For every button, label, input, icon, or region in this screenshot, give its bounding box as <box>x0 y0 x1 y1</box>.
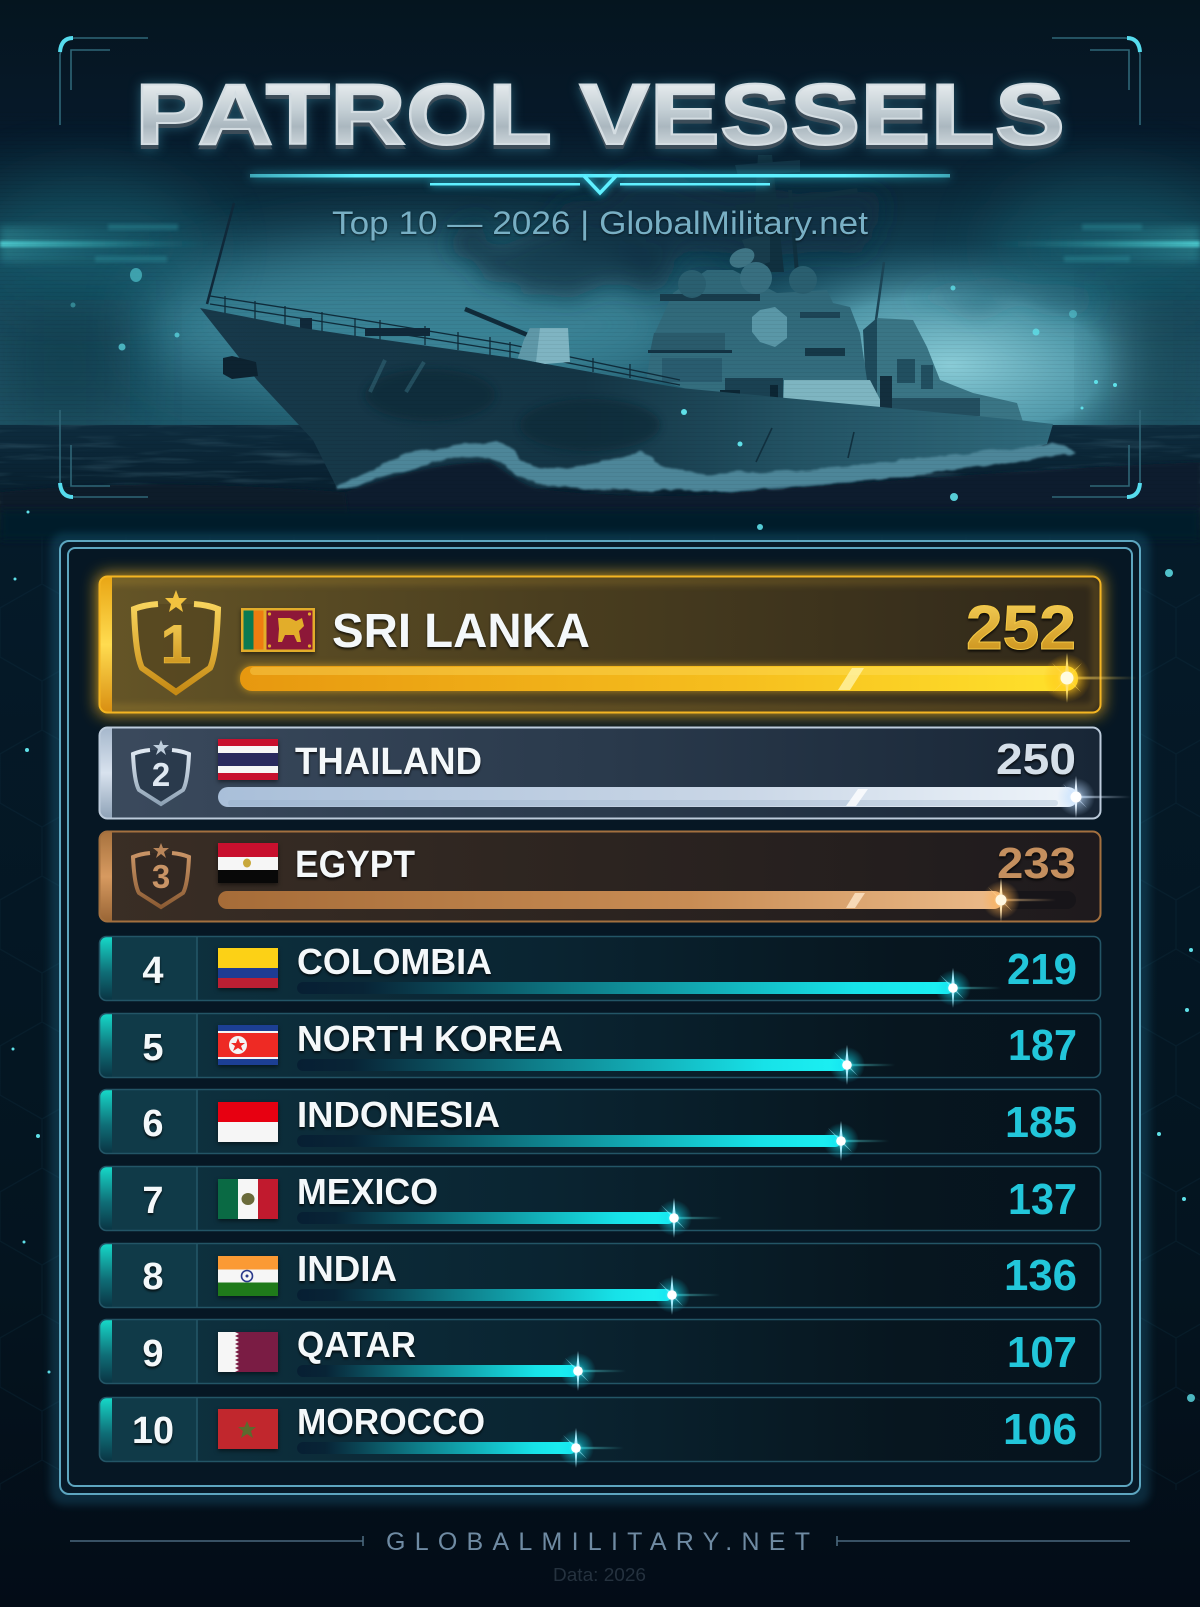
main mast <box>726 155 858 285</box>
flag: North Korea <box>218 1025 278 1065</box>
name: MOROCCO <box>297 1401 485 1442</box>
rank: 4 <box>142 950 164 992</box>
value: 219 <box>1007 945 1077 994</box>
title: PATROL VESSELS <box>135 67 1065 163</box>
hex grid background pattern <box>0 530 1200 1490</box>
HUD corner bracket: top left <box>60 38 148 125</box>
rank shield 1: 1 <box>161 613 191 675</box>
row 4: Colombia <box>99 936 1101 1008</box>
rank shield 2: 2 <box>152 756 170 793</box>
bar <box>218 878 1076 922</box>
value: 187 <box>1008 1021 1077 1070</box>
row 3: Egypt <box>99 831 1101 922</box>
row 2: Thailand <box>99 727 1131 819</box>
row 7: Mexico <box>99 1166 1101 1238</box>
rank shield 1 <box>134 590 218 692</box>
value: 252 <box>966 594 1076 663</box>
bow antenna <box>207 203 234 304</box>
horizontal light flare right <box>990 224 1200 262</box>
flag: Sri Lanka <box>241 608 315 652</box>
forward superstructure <box>647 270 887 413</box>
name: INDONESIA <box>297 1094 500 1135</box>
value: 136 <box>1004 1251 1077 1300</box>
rank: 8 <box>142 1256 164 1298</box>
flag: Morocco <box>218 1409 278 1449</box>
hero scene: warship at sea <box>0 0 1200 540</box>
value: 107 <box>1007 1328 1077 1377</box>
bar <box>297 968 1001 1008</box>
name: MEXICO <box>297 1171 438 1212</box>
horizontal light flare left <box>0 224 210 262</box>
rank: 10 <box>132 1410 174 1452</box>
flag: Thailand <box>218 739 278 780</box>
footer brand with rules: GLOBALMILITARY.NET <box>386 1528 810 1556</box>
rank shield 3 <box>133 843 189 907</box>
value: 185 <box>1005 1098 1077 1147</box>
name: EGYPT <box>295 844 415 886</box>
sea <box>0 425 1200 530</box>
title underline with chevron <box>250 174 950 193</box>
bottom hero fade <box>0 510 1200 540</box>
HUD corner bracket: top right <box>1052 38 1140 125</box>
value: 233 <box>997 839 1076 888</box>
bow railing <box>210 296 680 385</box>
rear superstructure <box>863 318 1023 422</box>
rank: 9 <box>142 1333 164 1375</box>
HUD corner bracket: bottom right <box>1052 410 1140 497</box>
storm clouds <box>450 186 1100 314</box>
bar <box>297 1275 720 1315</box>
anchor <box>223 356 258 379</box>
rank: 6 <box>142 1103 164 1145</box>
value: 137 <box>1008 1175 1077 1224</box>
bar <box>218 776 1131 818</box>
naval gun <box>465 309 570 364</box>
rear antenna <box>876 262 884 320</box>
data note: Data: 2026 <box>553 1565 646 1585</box>
rank: 7 <box>142 1180 164 1222</box>
bar <box>297 1198 722 1238</box>
sky backdrop <box>0 0 1200 490</box>
rank: 5 <box>142 1027 164 1069</box>
flag: Indonesia <box>218 1102 278 1142</box>
scanlines <box>0 110 1200 510</box>
value: 250 <box>996 735 1076 784</box>
name: NORTH KOREA <box>297 1018 563 1059</box>
row 1: Sri Lanka <box>97 574 1137 715</box>
name: COLOMBIA <box>297 941 492 982</box>
name: SRI LANKA <box>332 605 590 658</box>
rank shield 3: 3 <box>152 858 170 895</box>
flag: Egypt <box>218 843 278 883</box>
row 6: Indonesia <box>99 1089 1101 1161</box>
floating light particles <box>12 268 1195 1402</box>
bar <box>240 653 1137 703</box>
name: INDIA <box>297 1248 397 1289</box>
hull marks <box>370 360 854 462</box>
row 5: North Korea <box>99 1013 1101 1085</box>
name: QATAR <box>297 1324 416 1365</box>
row 8: India <box>99 1243 1101 1315</box>
flag: Qatar <box>218 1332 278 1372</box>
row 10: Morocco <box>99 1397 1101 1468</box>
name: THAILAND <box>295 741 482 783</box>
bow wave foam <box>0 440 1200 530</box>
hull <box>200 308 1053 494</box>
subtitle: Top 10 — 2026 | GlobalMilitary.net <box>332 205 868 241</box>
warship <box>200 155 1053 494</box>
row 9: Qatar <box>99 1319 1101 1391</box>
value: 106 <box>1003 1405 1077 1454</box>
flag: Mexico <box>218 1179 278 1219</box>
footer brand with rules <box>70 1528 1130 1556</box>
flag: Colombia <box>218 948 278 988</box>
HUD corner bracket: bottom left <box>60 410 148 497</box>
bar <box>297 1351 626 1391</box>
panel: ranking frame <box>50 533 1150 1505</box>
rank shield 2 <box>133 740 189 804</box>
bar <box>297 1121 889 1161</box>
bar <box>297 1045 895 1085</box>
bar <box>297 1428 624 1468</box>
flag: India <box>218 1256 278 1296</box>
